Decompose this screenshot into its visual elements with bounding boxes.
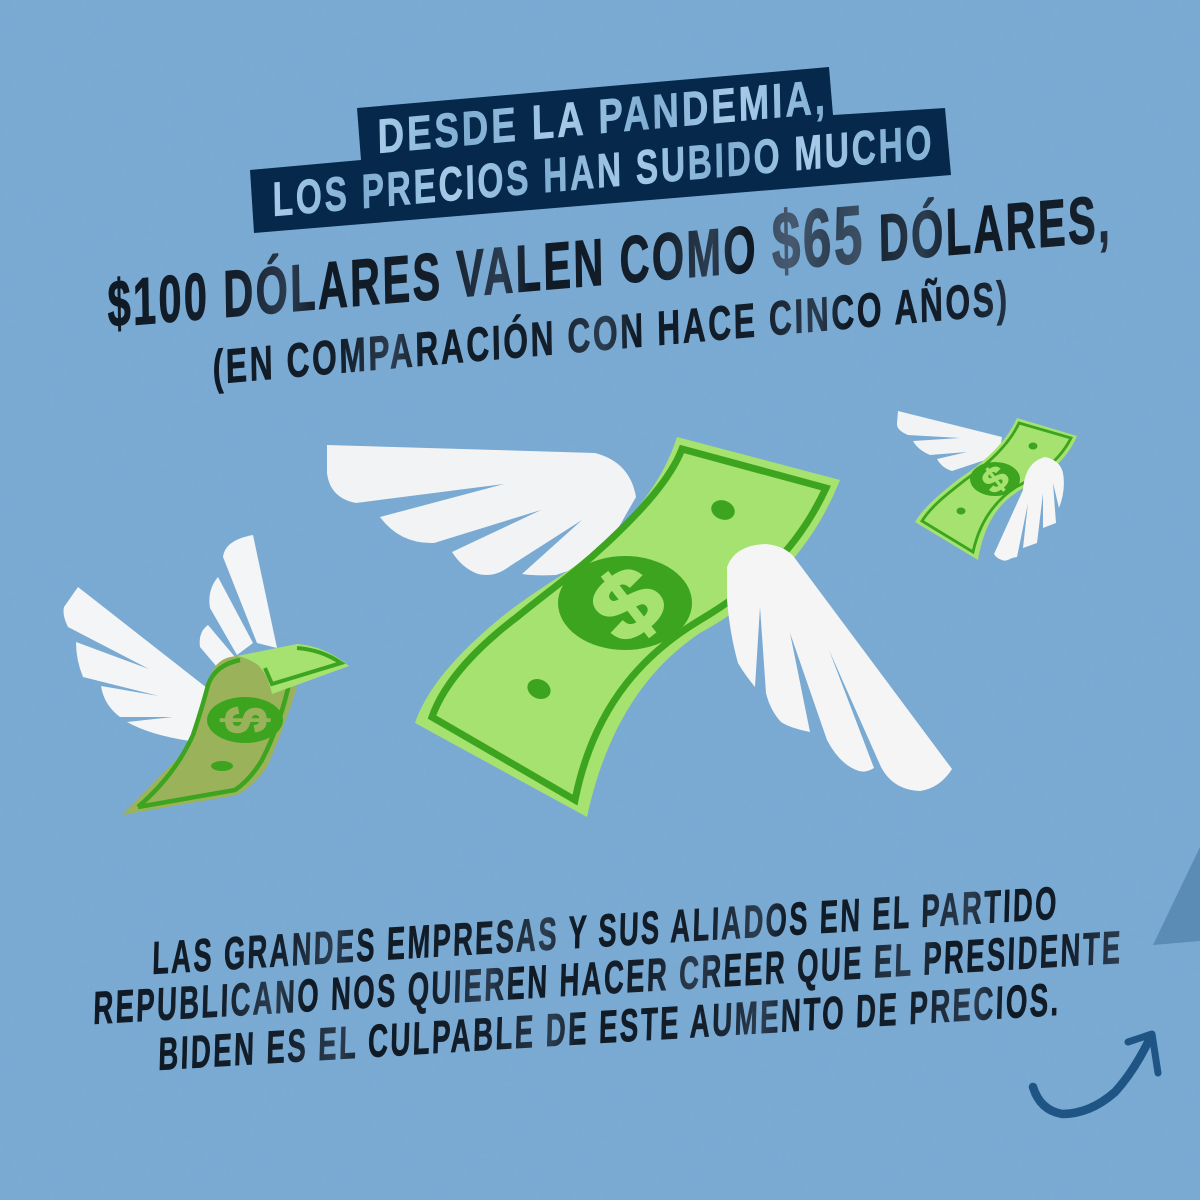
dollar medallion [207,697,283,743]
bill dot [211,761,233,771]
title banner: LOS PRECIOS HAN SUBIDO MUCHO [272,116,935,227]
bill dots [524,497,738,703]
illustration: large flying bill [327,437,952,817]
arrow [1033,1034,1158,1114]
illustration: small flying bill [897,411,1077,561]
bill dots [956,442,1038,514]
bill inner border [432,449,826,800]
bill back side [122,656,297,815]
bill border [138,660,290,807]
dollar medallion: $ [572,544,684,664]
bill body [415,437,840,817]
front wing [64,587,207,741]
back wing [327,445,636,575]
background triangle at right edge [1153,847,1200,945]
back wing [200,535,277,667]
flap border [265,648,341,684]
bill border [922,423,1071,552]
dollar medallion: $ [212,707,279,733]
back wing [897,411,1002,471]
title banner: DESDE LA PANDEMIA, [377,71,828,164]
bill flap [237,644,349,694]
front wing [727,544,952,791]
front wing [994,457,1064,561]
illustration: folded bill on left [64,535,349,815]
title banner [250,67,951,233]
dollar medallion: $ [974,457,1016,501]
bill body [915,418,1077,560]
